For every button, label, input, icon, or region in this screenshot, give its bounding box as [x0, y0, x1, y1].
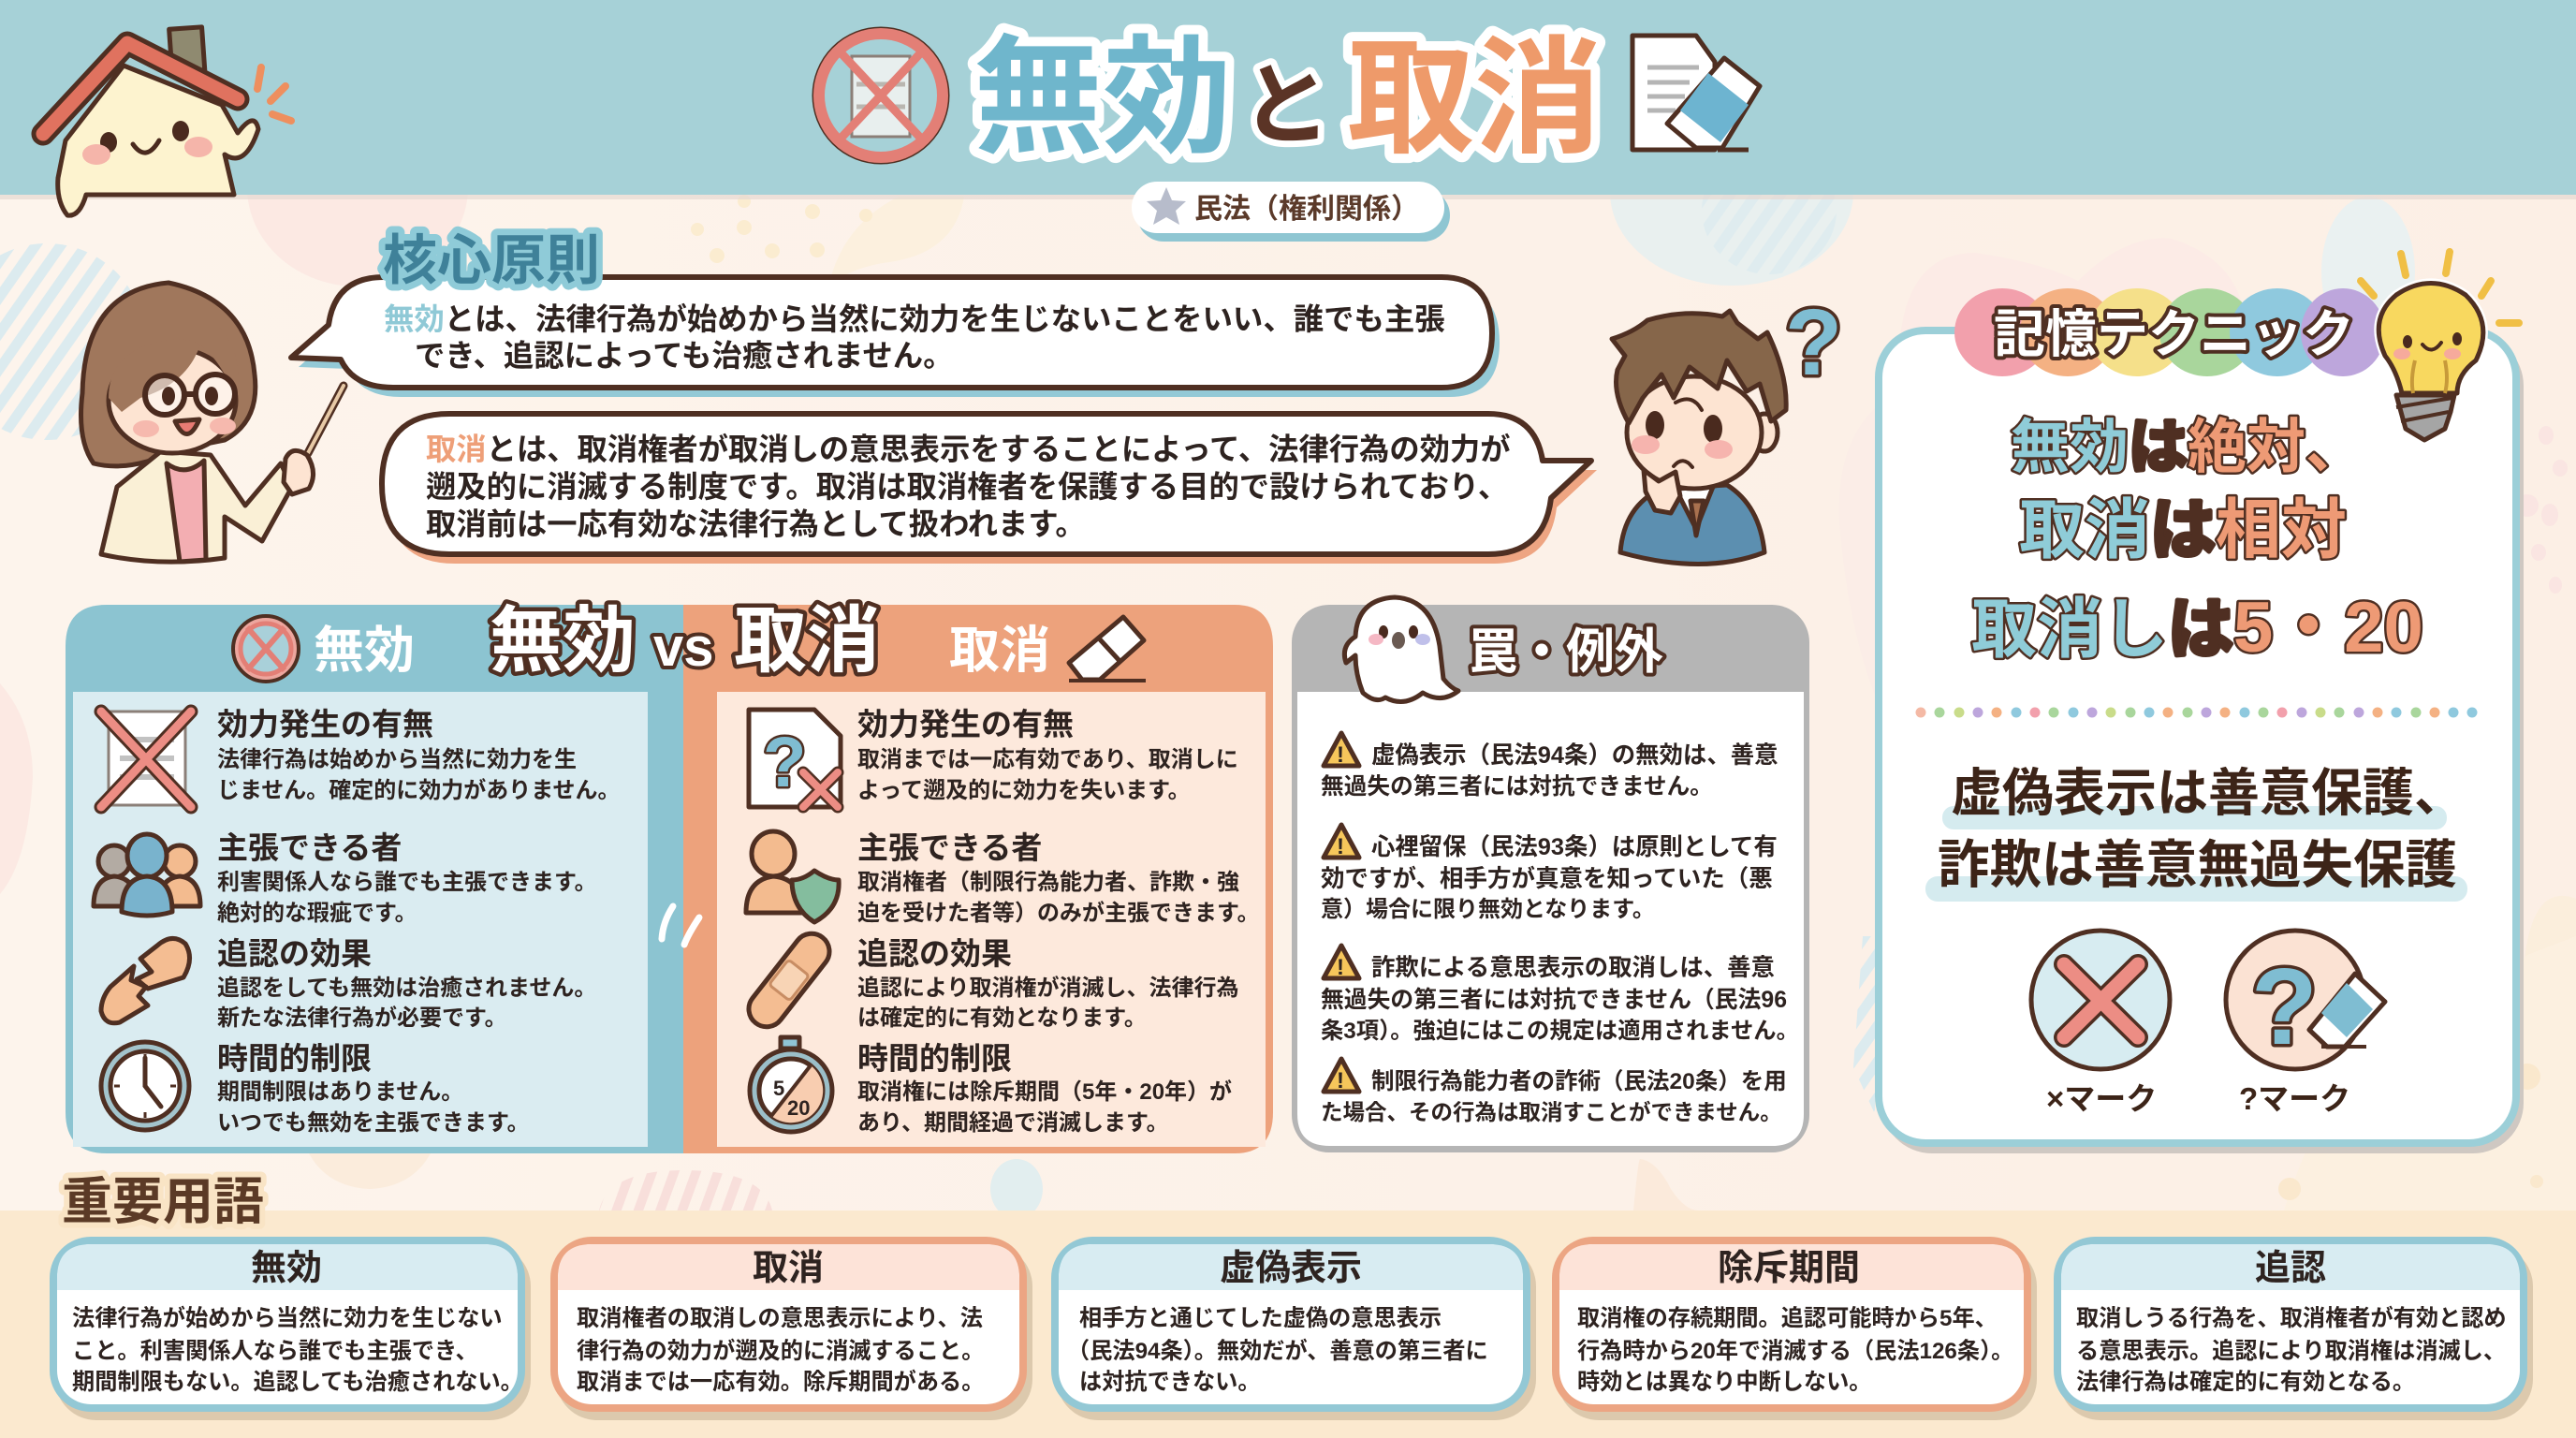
cross mark label: ×マーク	[2046, 1081, 2157, 1116]
speech bubble: rescission: 遡及的に消滅する制度です。取消は取消権者を保護する目的で設けられており、	[426, 470, 1508, 504]
speech bubble: rescission: 取消前は一応有効な法律行為として扱われます。	[426, 507, 1086, 541]
row icon: crossed document	[101, 712, 191, 807]
subject pill: 民法（権利関係）	[1194, 194, 1419, 225]
rescission row 1 text: 取消までは一応有効であり、取消しに	[857, 747, 1238, 772]
speech bubble: rescission	[382, 414, 1597, 564]
rescission row 4 text: 時間的制限	[857, 1041, 1012, 1076]
invalid row 2 text: 絶対的な瑕疵です。	[217, 901, 417, 926]
eraser icon	[1069, 617, 1146, 681]
question mark icon with eraser: ?	[2251, 946, 2318, 1067]
light bulb icon	[2361, 252, 2519, 440]
trap heading: 罠・例外	[1469, 625, 1663, 680]
rescission row 3 text: は確定的に有効となります。	[857, 1005, 1147, 1031]
warning icon 2: !	[1337, 834, 1344, 859]
confused boy character: ?	[1785, 290, 1842, 395]
glossary card: false declaration: は対抗できない。	[1079, 1370, 1261, 1395]
subject pill	[1132, 182, 1450, 242]
rescission column title: 取消	[949, 623, 1050, 679]
invalid column title: 無効	[314, 623, 415, 679]
invalid row 4 text: いつでも無効を主張できます。	[217, 1110, 530, 1136]
glossary card: exclusion period: 除斥期間	[1718, 1249, 1860, 1288]
house mascot	[43, 27, 291, 215]
speech bubble: invalid: 無効とは、法律行為が始めから当然に効力を生じないことをいい、誰でも主張	[384, 301, 1445, 336]
rescission row 1 text: 効力発生の有無	[857, 707, 1074, 741]
memory technique panel	[1879, 252, 2524, 1153]
comparison heading: 無効	[490, 599, 636, 682]
rainbow heading: 記憶テクニック	[1994, 305, 2354, 363]
invalid row 4 text	[217, 1041, 530, 1136]
glossary section band	[0, 1211, 2576, 1438]
trap text 3: 無過失の第三者には対抗できません（民法96	[1321, 987, 1787, 1013]
row icon: stopwatch: 20	[787, 1096, 810, 1120]
invalid row 3 text: 新たな法律行為が必要です。	[217, 1005, 507, 1031]
rescission row 4 text	[857, 1041, 1232, 1136]
glossary card: ratification: 追認	[2255, 1249, 2326, 1288]
title: 取消	[1347, 27, 1602, 169]
trap text 2	[1321, 834, 1778, 922]
glossary card: invalid	[50, 1237, 531, 1420]
glossary card: exclusion period: 時効とは異なり中断しない。	[1577, 1370, 1871, 1395]
trap text 2: 心裡留保（民法93条）は原則として有	[1371, 834, 1778, 860]
invalid row 4 text: 期間制限はありません。	[217, 1079, 463, 1105]
rescission row 4 text: あり、期間経過で消滅します。	[857, 1110, 1169, 1136]
right column body	[717, 692, 1266, 1147]
rescission row 3 text	[857, 936, 1239, 1031]
glossary card: ratification	[2054, 1237, 2533, 1420]
rescission row 2 text: 主張できる者	[857, 830, 1042, 865]
glossary card: invalid: 法律行為が始めから当然に効力を生じない	[72, 1305, 503, 1331]
glossary card: invalid: こと。利害関係人なら誰でも主張でき、	[72, 1339, 478, 1364]
highlighted mnemonic: false declaration	[1925, 764, 2467, 902]
warning icon 1: !	[1337, 742, 1344, 768]
rescission row 2 text: 取消権者（制限行為能力者、詐欺・強	[857, 870, 1239, 895]
row icon: stopwatch: 5	[773, 1077, 784, 1100]
row icon: bandage	[741, 927, 837, 1034]
invalid row 2 text: 主張できる者	[217, 830, 402, 865]
mnemonic 2: 取消は相対	[2019, 493, 2347, 566]
glossary card: false declaration: 虚偽表示	[1220, 1249, 1362, 1288]
invalid row 1 text: 法律行為は始めから当然に効力を生	[217, 747, 577, 772]
comparison heading: vs	[653, 617, 714, 678]
glossary card: ratification: 取消しうる行為を、取消権者が有効と認め	[2076, 1305, 2507, 1331]
comparison heading: 取消	[734, 599, 880, 682]
invalid column icon	[233, 616, 299, 682]
invalid row 1 text: じません。確定的に効力がありません。	[217, 777, 621, 803]
warning icon 3: !	[1337, 955, 1344, 980]
glossary card: ratification: る意思表示。追認により取消権は消滅し、	[2076, 1339, 2506, 1364]
trap text 4	[1321, 1068, 1787, 1124]
invalid row 3 text: 追認の効果	[217, 936, 372, 971]
glossary card: ratification: 法律行為は確定的に有効となる。	[2076, 1370, 2415, 1395]
glossary card: rescission	[550, 1237, 1032, 1420]
rescission row 2 text	[857, 830, 1260, 926]
left column body	[73, 692, 648, 1147]
glossary card: rescission: 取消権者の取消しの意思表示により、法	[577, 1306, 983, 1331]
title	[973, 26, 1602, 170]
trap text 3: 詐欺による意思表示の取消しは、善意	[1371, 955, 1775, 981]
confused boy character	[1612, 290, 1842, 564]
glossary card: exclusion period	[1552, 1237, 2037, 1420]
comparison heading	[490, 599, 880, 682]
glossary card: invalid: 無効	[251, 1249, 322, 1288]
cross mark icon	[2031, 931, 2170, 1069]
warning icon 4: !	[1337, 1068, 1344, 1093]
trap text 2: 意）場合に限り無効となります。	[1321, 897, 1655, 922]
invalid row 2 text	[217, 830, 597, 926]
rescission row 1 text	[857, 707, 1238, 803]
title: と	[1241, 56, 1331, 156]
rescission row 3 text: 追認の効果	[857, 936, 1012, 971]
row icon: group of people	[94, 834, 200, 916]
dotted divider	[1915, 708, 2477, 717]
speech bubble: rescission: 取消とは、取消権者が取消しの意思表示をすることによって、法律行為の効力が	[426, 433, 1511, 466]
invalid row 4 text: 時間的制限	[217, 1041, 372, 1076]
ghost icon	[1344, 597, 1458, 701]
title icon: crossed hourglass document	[813, 28, 948, 163]
background decorations	[0, 88, 2576, 1219]
row icon: clock	[101, 1042, 189, 1130]
trap text 1	[1321, 742, 1778, 800]
glossary card: exclusion period: 行為時から20年で消滅する（民法126条）。	[1577, 1339, 2013, 1364]
glossary card: false declaration: 相手方と通じてした虚偽の意思表示	[1079, 1306, 1442, 1331]
mnemonic 3: 取消しは5・20	[1971, 588, 2423, 668]
trap text 1: 虚偽表示（民法94条）の無効は、善意	[1371, 742, 1778, 769]
trap text 3	[1321, 955, 1799, 1044]
row icon: document with question: ?	[763, 723, 806, 802]
warning icon 2	[1324, 825, 1359, 859]
warning icon 1	[1324, 733, 1359, 768]
glossary card: exclusion period: 取消権の存続期間。追認可能時から5年、	[1577, 1306, 1998, 1331]
mnemonic 1: 無効は絶対、	[2011, 415, 2364, 480]
speech bubble: invalid: でき、追認によっても治癒されません。	[415, 339, 954, 373]
speech bubble: invalid	[291, 277, 1500, 397]
glossary card: rescission: 律行為の効力が遡及的に消滅すること。	[577, 1338, 984, 1364]
title icon: document and eraser	[1632, 36, 1760, 150]
heading: core principle: 核心原則	[383, 230, 600, 291]
invalid row 1 text: 効力発生の有無	[217, 707, 433, 741]
rescission row 4 text: 取消権には除斥期間（5年・20年）が	[857, 1078, 1232, 1105]
glossary card: rescission: 取消までは一応有効。除斥期間がある。	[577, 1369, 984, 1395]
trap text 4: た場合、その行為は取消すことができません。	[1321, 1099, 1782, 1124]
row icon: person with shield	[746, 831, 839, 922]
trap text 1: 無過失の第三者には対抗できません。	[1321, 773, 1713, 800]
invalid row 2 text: 利害関係人なら誰でも主張できます。	[217, 870, 597, 895]
glossary card: false declaration	[1051, 1237, 1536, 1420]
comparison panel: invalid vs rescission	[66, 599, 1273, 1153]
row icon: broken bandage	[101, 938, 190, 1023]
invalid row 1 text	[217, 707, 621, 803]
row icon: document with question	[749, 710, 841, 807]
rescission row 3 text: 追認により取消権が消滅し、法律行為	[857, 975, 1239, 1001]
teacher character	[80, 283, 344, 562]
glossary card: false declaration: （民法94条）。無効だが、善意の第三者に	[1067, 1338, 1488, 1364]
title: 無効	[973, 26, 1232, 170]
trap and exception panel	[1292, 597, 1809, 1152]
glossary heading: 重要用語	[62, 1174, 264, 1230]
warning icon 4	[1324, 1059, 1359, 1093]
header band	[0, 0, 2576, 199]
glossary card: invalid: 期間制限もない。追認しても治癒されない。	[72, 1370, 523, 1395]
row icon: stopwatch	[750, 1037, 832, 1132]
trap text 3: 条3項）。強迫にはこの規定は適用されません。	[1321, 1019, 1799, 1044]
trap text 4: 制限行為能力者の詐術（民法20条）を用	[1371, 1068, 1787, 1094]
invalid row 3 text	[217, 936, 596, 1031]
highlighted mnemonic: false declaration: 虚偽表示は善意保護、	[1951, 764, 2466, 822]
rescission row 1 text: よって遡及的に効力を失います。	[857, 778, 1191, 803]
glossary card: rescission: 取消	[753, 1249, 824, 1288]
question mark label: ?マーク	[2239, 1081, 2350, 1116]
invalid row 3 text: 追認をしても無効は治癒されません。	[217, 976, 596, 1001]
rescission row 2 text: 迫を受けた者等）のみが主張できます。	[857, 900, 1260, 926]
center sparkle marks	[662, 906, 699, 945]
rainbow heading	[1954, 288, 2385, 376]
highlighted mnemonic: false declaration: 詐欺は善意無過失保護	[1938, 836, 2457, 894]
trap text 2: 効ですが、相手方が真意を知っていた（悪	[1321, 865, 1773, 892]
question mark icon with eraser	[2226, 931, 2385, 1069]
warning icon 3	[1324, 946, 1359, 980]
